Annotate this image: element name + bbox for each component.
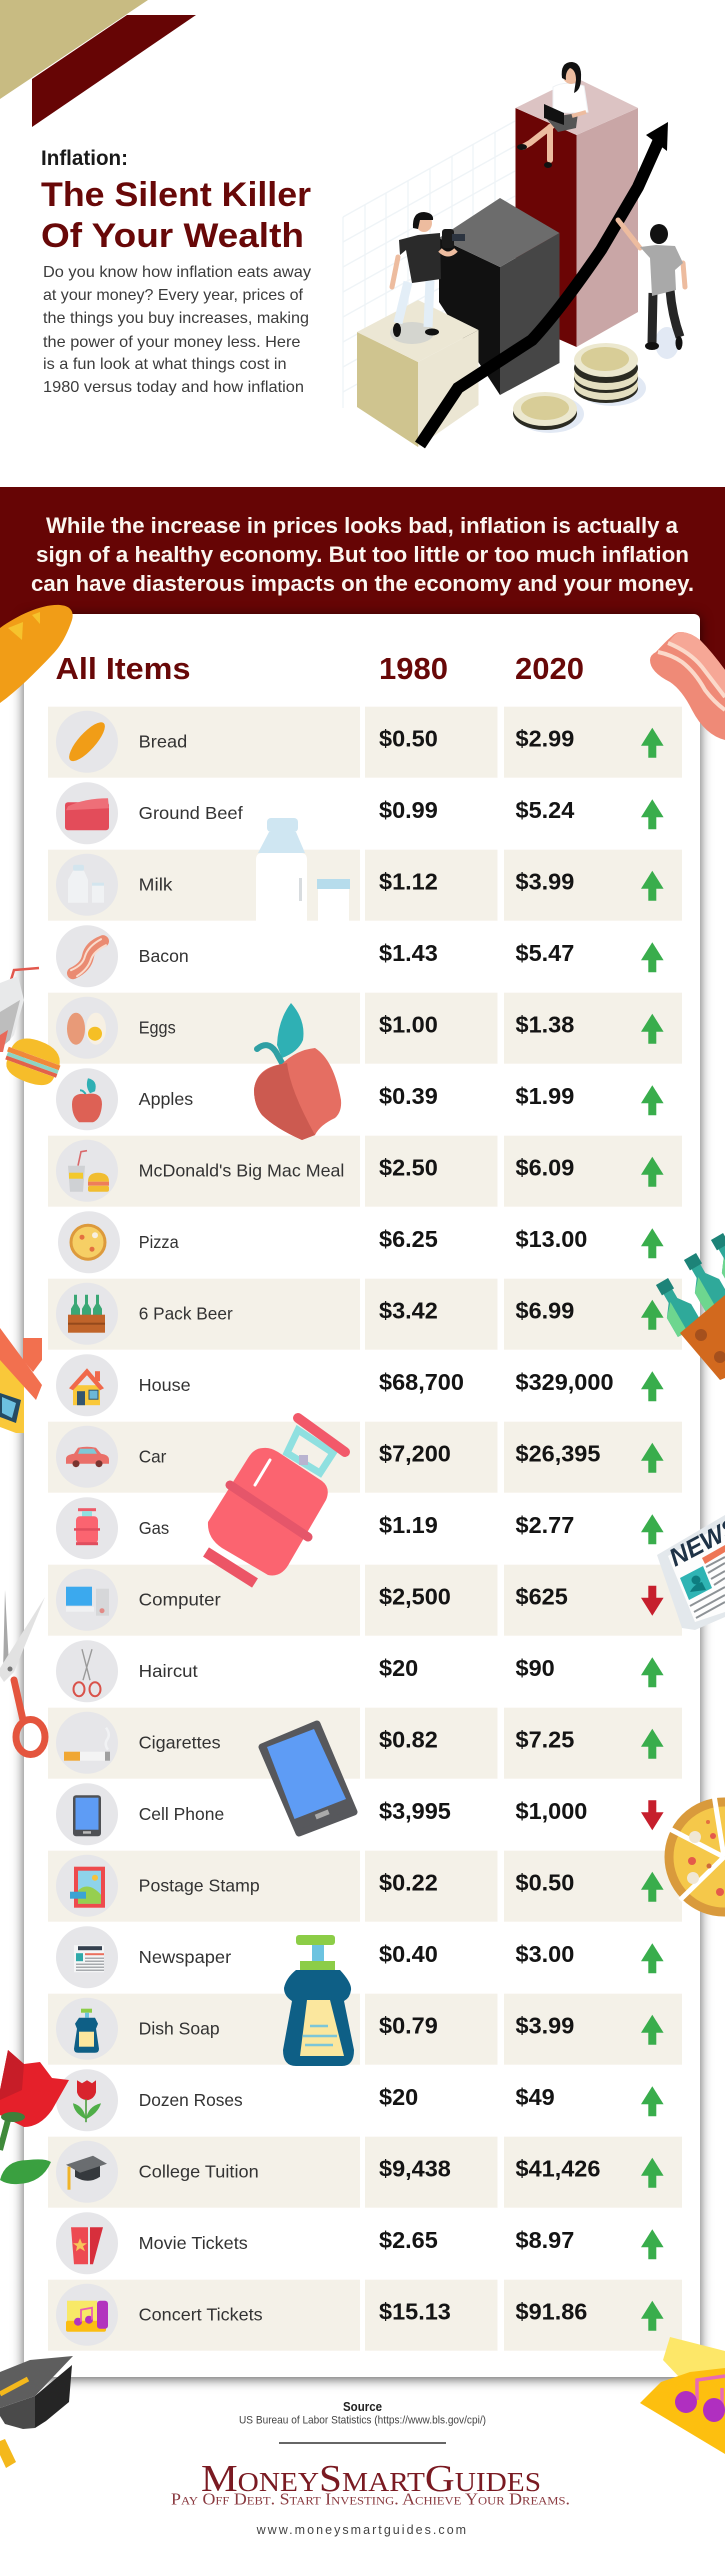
row: Eggs (48, 993, 682, 1064)
arrow down (641, 1800, 664, 1830)
price 2020: $1,000 (516, 1798, 587, 1824)
logo tagline: Pay Off Debt. Start Investing. Achieve Your Dreams. (171, 2490, 570, 2508)
row: Pizza (58, 1211, 664, 1273)
arrow up (641, 728, 664, 758)
label: Movie Tickets (139, 2233, 248, 2253)
price 1980: $20 (379, 2084, 418, 2110)
arrow up (641, 942, 664, 972)
price 2020: $3.99 (516, 869, 574, 895)
label: Bacon (139, 946, 189, 966)
label: Newspaper (139, 1947, 231, 1967)
label: Bread (139, 732, 187, 752)
decoration: house (0, 1328, 42, 1433)
icon: milk (68, 865, 104, 903)
price 2020: $2.77 (516, 1512, 574, 1538)
label: Dish Soap (139, 2019, 220, 2039)
price 1980: $20 (379, 1655, 418, 1681)
icon: eggs (67, 1013, 106, 1045)
arrow up (641, 1371, 664, 1401)
arrow up (641, 2301, 664, 2331)
price 2020: $1.38 (516, 1012, 574, 1038)
icon: concert tickets (66, 2301, 108, 2332)
intro paragraph: 1980 versus today and how inflation (43, 379, 304, 396)
background grid (343, 121, 515, 408)
icon: movie tickets (71, 2227, 103, 2264)
price 1980: $1.19 (379, 1512, 438, 1538)
source note: Source (343, 2399, 382, 2414)
price 2020: $7.25 (516, 1727, 574, 1753)
price 2020: $2.99 (516, 726, 574, 752)
table header: All Items (56, 651, 190, 686)
woman with laptop (517, 62, 588, 168)
decoration: bacon strip (650, 632, 725, 740)
icon: bacon (71, 939, 106, 976)
decoration: bread loaf (0, 605, 73, 703)
decoration: dish soap bottle (283, 1935, 354, 2066)
price 2020: $3.00 (516, 1941, 574, 1967)
source note: US Bureau of Labor Statistics (https://www.bls.gov/cpi/) (239, 2414, 486, 2426)
intro paragraph: is a fun look at what things cost in (43, 356, 287, 373)
row: House (56, 1354, 664, 1416)
price 2020: $90 (516, 1655, 555, 1681)
arrow up (641, 1228, 664, 1258)
row: Bacon (56, 925, 664, 987)
rising arrow (420, 122, 668, 445)
arrow up (641, 1657, 664, 1687)
row: Cell Phone (56, 1783, 664, 1845)
icon: burger meal (68, 1151, 109, 1192)
arrow up (641, 1872, 664, 1902)
icon: house (69, 1368, 104, 1405)
price 2020: $49 (516, 2084, 555, 2110)
intro paragraph: at your money? Every year, prices of (43, 287, 304, 304)
label: Ground Beef (139, 803, 243, 823)
row: Car (48, 1422, 682, 1493)
price 1980: $0.39 (379, 1083, 438, 1109)
dark column (439, 198, 560, 395)
main title: Of Your Wealth (41, 217, 304, 255)
kicker: Inflation: (41, 147, 128, 170)
price 2020: $26,395 (516, 1441, 600, 1467)
price 1980: $3,995 (379, 1798, 451, 1824)
icon: gas tank (74, 1508, 100, 1545)
row: Movie Tickets (56, 2212, 664, 2274)
row: College Tuition (48, 2137, 682, 2208)
decoration: apple (254, 1003, 341, 1140)
icon: postage stamp (70, 1867, 105, 1908)
row: Haircut (56, 1640, 664, 1702)
arrow up (641, 1729, 664, 1759)
decoration: soda and fries (0, 968, 39, 1052)
label: Eggs (139, 1018, 176, 1038)
price 1980: $6.25 (379, 1226, 438, 1252)
maroon banner (0, 487, 725, 680)
intro paragraph (43, 264, 311, 396)
price 1980: $0.50 (379, 726, 438, 752)
price 2020: $6.09 (516, 1155, 574, 1181)
price 2020: $13.00 (516, 1226, 587, 1252)
label: Computer (139, 1590, 221, 1610)
decoration: beer crate (650, 1230, 725, 1380)
tall maroon column (516, 78, 638, 347)
row: Ground Beef (56, 782, 664, 844)
price 1980: $3.42 (379, 1298, 438, 1324)
website url: www.moneysmartguides.com (256, 2523, 466, 2537)
label: College Tuition (139, 2162, 259, 2182)
decoration: pizza (664, 1795, 725, 1912)
label: Milk (139, 875, 173, 895)
price 1980: $0.82 (379, 1727, 438, 1753)
banner text: can have diasterous impacts on the economy and your money. (31, 571, 694, 596)
row: Postage Stamp (48, 1851, 682, 1922)
label: Cigarettes (139, 1733, 221, 1753)
label: Cell Phone (139, 1804, 224, 1824)
arrow up (641, 2229, 664, 2259)
logo: MoneySmartGuides: MONEYSMARTGUIDES (201, 2458, 541, 2500)
single coin (513, 392, 584, 433)
price 1980: $1.00 (379, 1012, 438, 1038)
row: Gas (56, 1497, 664, 1559)
icon: beer crate (68, 1295, 105, 1333)
decoration: newspaper (657, 1512, 725, 1630)
decoration: gas tank (206, 1418, 345, 1583)
row: Apples (56, 1068, 664, 1130)
price 2020: $6.99 (516, 1298, 574, 1324)
price 2020: $41,426 (516, 2156, 600, 2182)
arrow up (641, 871, 664, 901)
price 1980: $0.40 (379, 1941, 438, 1967)
table header (56, 651, 584, 686)
icon: car (66, 1447, 109, 1467)
icon: pizza (71, 1225, 105, 1259)
illustration: rising bars, people, coins (343, 62, 685, 447)
label: 6 Pack Beer (139, 1304, 233, 1324)
icon: scissors (74, 1649, 100, 1696)
icon: ground beef (65, 798, 109, 830)
row: McDonald's Big Mac Meal (48, 1136, 682, 1207)
price 1980: $2.65 (379, 2227, 438, 2253)
table header: 1980 (379, 651, 448, 686)
arrow up (641, 2158, 664, 2188)
row: Concert Tickets (48, 2280, 682, 2351)
icon: cigarette (64, 1728, 110, 1761)
label: Car (139, 1447, 167, 1467)
icon: graduation cap (66, 2156, 107, 2190)
price 1980: $9,438 (379, 2156, 451, 2182)
icon: computer (66, 1587, 109, 1616)
arrow up (641, 2015, 664, 2045)
arrow up (641, 2086, 664, 2116)
row: Dish Soap (48, 1994, 682, 2065)
label: Pizza (139, 1232, 179, 1252)
arrow up (641, 1943, 664, 1973)
icon: newspaper (74, 1945, 104, 1972)
decoration: milk bottle and glass (256, 818, 350, 921)
main title: The Silent Killer (41, 176, 311, 214)
price 1980: $15.13 (379, 2299, 451, 2325)
icon: rose (73, 2080, 101, 2122)
row: Bread (48, 707, 682, 778)
arrow up (641, 1014, 664, 1044)
arrow up (641, 1514, 664, 1544)
arrow up (641, 1157, 664, 1187)
price 2020: $5.24 (516, 797, 574, 823)
label: Postage Stamp (139, 1876, 260, 1896)
corner decoration (0, 0, 196, 127)
banner text: sign of a healthy economy. But too little or too much inflation (36, 542, 689, 567)
price 1980: $1.43 (379, 940, 438, 966)
label: Dozen Roses (139, 2090, 243, 2110)
price 1980: $1.12 (379, 869, 438, 895)
label: Haircut (139, 1661, 198, 1681)
arrow up (641, 1300, 664, 1330)
row: Cigarettes (48, 1708, 682, 1779)
arrow down (641, 1586, 664, 1616)
price 2020: $5.47 (516, 940, 574, 966)
banner text: While the increase in prices looks bad, inflation is actually a (46, 513, 679, 538)
intro paragraph: Do you know how inflation eats away (43, 264, 311, 281)
row: Computer (48, 1565, 682, 1636)
price 2020: $3.99 (516, 2013, 574, 2039)
intro paragraph: the things you buy increases, making (43, 310, 309, 327)
main title (41, 176, 311, 255)
row: Newspaper (56, 1926, 664, 1988)
price 2020: $8.97 (516, 2227, 574, 2253)
price 2020: $625 (516, 1584, 568, 1610)
decoration: graduation cap (0, 2356, 73, 2468)
coin stack (574, 343, 646, 406)
arrow up (641, 1085, 664, 1115)
banner text (31, 513, 694, 596)
price 2020: $1.99 (516, 1083, 574, 1109)
price 2020: $0.50 (516, 1870, 574, 1896)
icon: dish soap (74, 2009, 99, 2053)
price 1980: $0.79 (379, 2013, 438, 2039)
row: Milk (48, 850, 682, 921)
decoration: burger (0, 1032, 66, 1091)
row: Dozen Roses (56, 2069, 664, 2131)
arrow up (641, 799, 664, 829)
label: Apples (139, 1089, 193, 1109)
intro paragraph: the power of your money less. Here (43, 334, 301, 351)
price 1980: $2.50 (379, 1155, 438, 1181)
price 1980: $68,700 (379, 1369, 464, 1395)
price 1980: $2,500 (379, 1584, 451, 1610)
table header: 2020 (515, 651, 584, 686)
row: 6 Pack Beer (48, 1279, 682, 1350)
decoration: cell phone (262, 1724, 354, 1833)
decoration: rose (0, 2050, 69, 2184)
decoration: scissors (0, 1590, 45, 1754)
label: Concert Tickets (139, 2305, 263, 2325)
title block (41, 147, 311, 396)
price 1980: $0.22 (379, 1870, 438, 1896)
man with binoculars (390, 212, 465, 344)
price 2020: $91.86 (516, 2299, 587, 2325)
decoration: concert ticket (640, 2337, 725, 2454)
label: Gas (139, 1518, 169, 1538)
man pushing arrow (618, 220, 685, 359)
label: House (139, 1375, 191, 1395)
beige block (357, 300, 478, 447)
icon: apple (72, 1078, 102, 1122)
table card (24, 614, 700, 2377)
source note (239, 2399, 486, 2426)
price 1980: $0.99 (379, 797, 438, 823)
price 2020: $329,000 (516, 1369, 614, 1395)
icon: bread (64, 717, 110, 766)
arrow up (641, 1443, 664, 1473)
label: McDonald's Big Mac Meal (139, 1161, 344, 1181)
price 1980: $7,200 (379, 1441, 451, 1467)
icon: cell phone (73, 1795, 101, 1836)
